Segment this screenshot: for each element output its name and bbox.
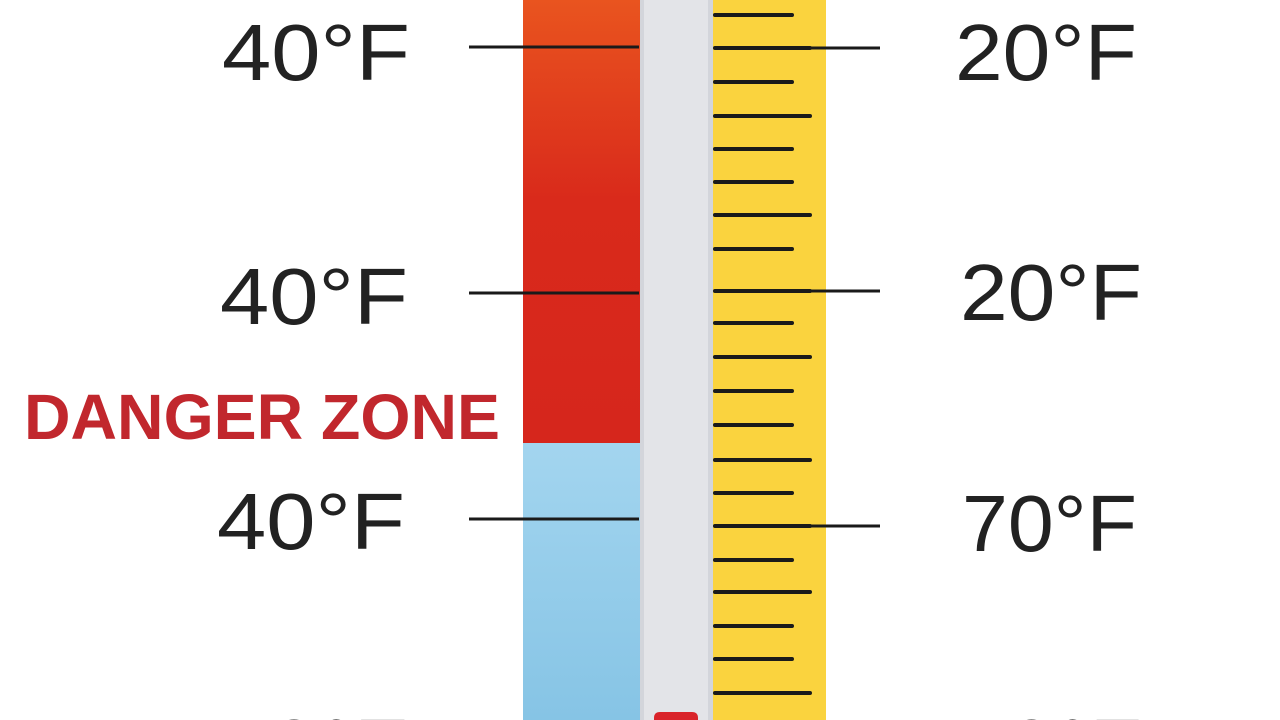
yellow scale bbox=[713, 0, 826, 720]
left labels: 40°F bbox=[217, 477, 405, 566]
glass tube bbox=[640, 0, 713, 720]
danger zone label: DANGER ZONE bbox=[24, 381, 500, 453]
right labels: 20°F bbox=[955, 8, 1137, 97]
cold column bbox=[523, 443, 640, 720]
cut-off bottom labels bbox=[289, 719, 1138, 720]
right labels: 70°F bbox=[962, 479, 1137, 568]
leader lines bbox=[469, 47, 880, 526]
left labels bbox=[217, 8, 410, 566]
right labels: 20°F bbox=[960, 248, 1142, 337]
mercury top bbox=[654, 712, 698, 720]
left labels: 40°F bbox=[220, 252, 408, 341]
right labels bbox=[955, 8, 1142, 568]
hot column bbox=[523, 0, 640, 443]
left labels: 40°F bbox=[222, 8, 410, 97]
